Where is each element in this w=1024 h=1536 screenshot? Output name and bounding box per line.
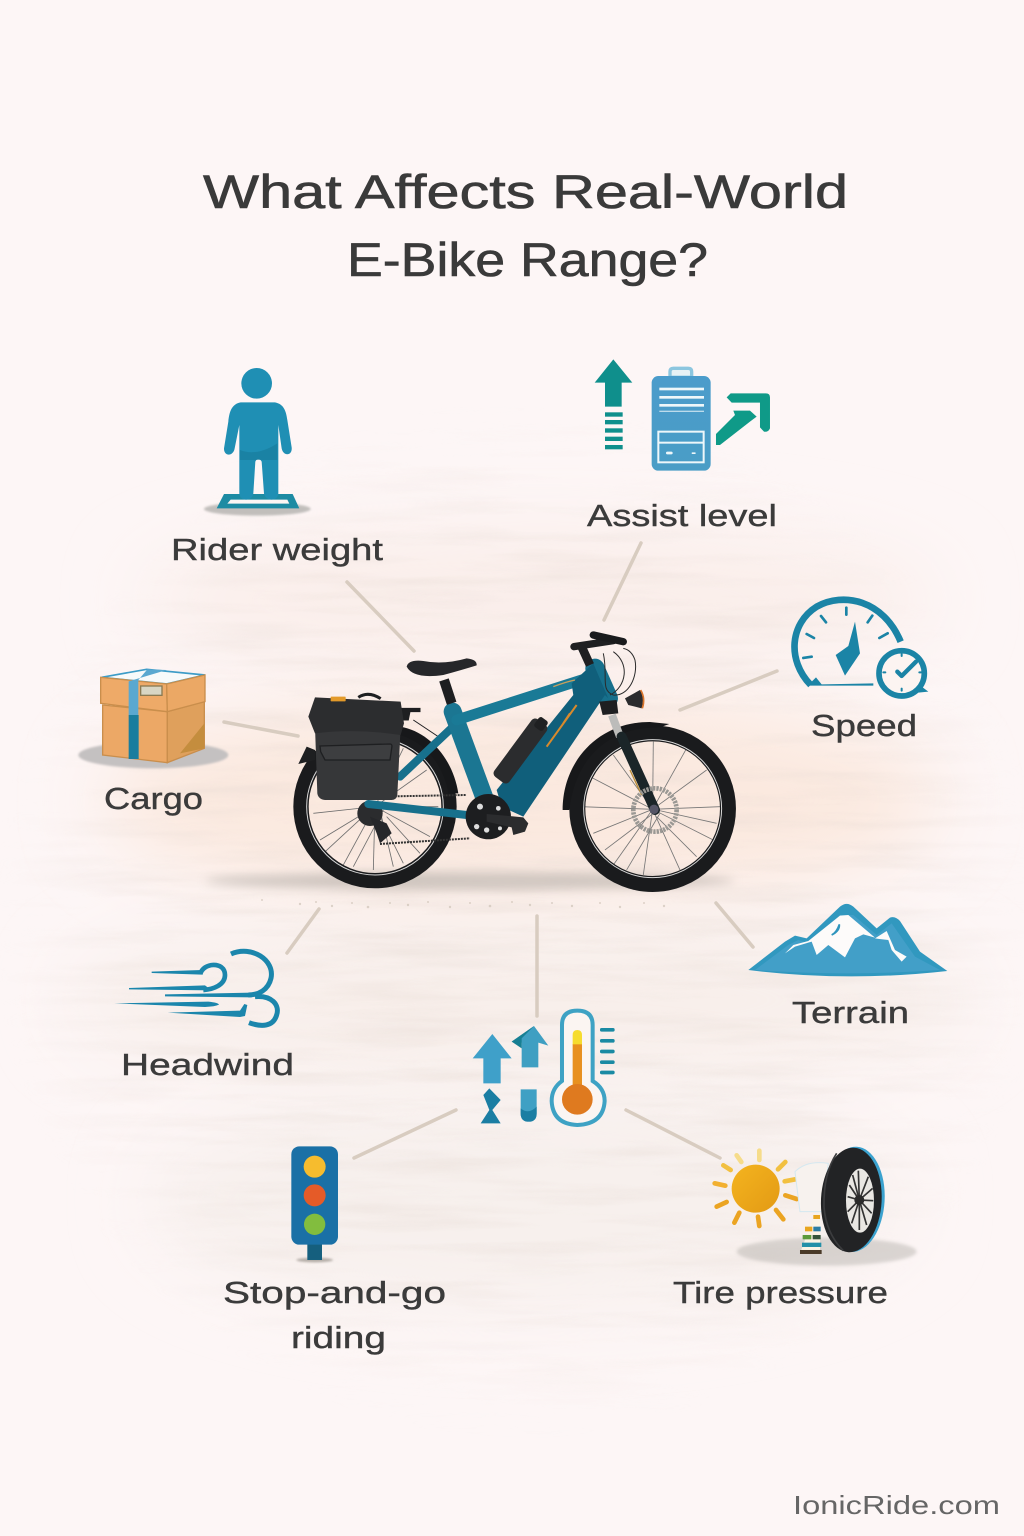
pressure gauge stack xyxy=(795,1163,828,1254)
diagonal arrow xyxy=(716,393,770,445)
icon: speedometer xyxy=(795,600,928,696)
label: terrain: Terrain xyxy=(792,995,909,1030)
thermometer xyxy=(552,1011,605,1125)
label: headwind: Headwind xyxy=(121,1047,294,1082)
icon: cargo box xyxy=(78,669,228,768)
label: cargo: Cargo xyxy=(104,781,203,816)
connector: stop-and-go xyxy=(354,1110,456,1158)
icon: assist level xyxy=(595,359,770,471)
label: rider weight: Rider weight xyxy=(171,532,383,567)
front wheel xyxy=(577,733,728,884)
label: stop-and-go riding xyxy=(223,1275,446,1355)
chain and drivetrain xyxy=(357,795,470,844)
top gust xyxy=(129,965,225,990)
background xyxy=(83,506,959,1323)
hourglass shape xyxy=(481,1088,501,1123)
connector: rider weight xyxy=(347,582,414,651)
arrow left xyxy=(473,1034,512,1083)
capsule xyxy=(521,1089,537,1122)
crank and chainring xyxy=(466,794,528,839)
title: E-Bike Range? xyxy=(347,233,708,286)
bicycle xyxy=(298,635,728,884)
connector: assist level xyxy=(604,543,641,620)
connector: speed xyxy=(680,671,777,710)
rear wheel xyxy=(301,733,449,881)
up arrow with steps xyxy=(595,359,632,449)
large curl xyxy=(231,951,277,1025)
connector: terrain xyxy=(716,903,753,947)
connector: cargo xyxy=(224,722,298,736)
label: stop-and-go riding: riding xyxy=(291,1320,386,1355)
arrow right xyxy=(512,1026,548,1067)
saddle xyxy=(407,658,477,676)
battery xyxy=(492,716,549,785)
title: What Affects Real-World xyxy=(203,165,848,218)
icon: terrain mountain xyxy=(748,904,947,976)
label: stop-and-go riding: Stop-and-go xyxy=(223,1275,446,1310)
connector: temperature xyxy=(535,916,539,1016)
frame tubes xyxy=(368,668,608,815)
tire xyxy=(818,1145,887,1254)
icon: traffic light xyxy=(291,1146,338,1262)
fork xyxy=(599,700,655,810)
label: tire pressure: Tire pressure xyxy=(673,1275,888,1310)
brake disc xyxy=(633,788,677,832)
icon: headwind xyxy=(114,951,277,1025)
pannier bag xyxy=(298,694,404,800)
connector: tire pressure xyxy=(626,1110,720,1158)
title xyxy=(203,165,848,286)
head gusset and down tube xyxy=(497,663,608,817)
label: assist level: Assist level xyxy=(587,498,777,533)
icon: sun and tire xyxy=(715,1145,917,1266)
seat post xyxy=(444,680,452,703)
handlebar and cables xyxy=(574,635,636,695)
rear fender xyxy=(400,727,458,793)
battery xyxy=(652,368,711,471)
connector: headwind xyxy=(287,909,319,953)
scale ticks xyxy=(600,1028,615,1074)
headlight xyxy=(625,690,644,708)
icon: temperature and arrows xyxy=(473,1011,615,1125)
sun xyxy=(715,1151,797,1226)
ground shadow xyxy=(205,872,735,908)
rear rack xyxy=(400,708,443,740)
icon: rider on scale xyxy=(204,368,311,516)
brand footer: IonicRide.com xyxy=(793,1490,1000,1520)
label: speed: Speed xyxy=(811,708,917,743)
front fender xyxy=(563,722,669,810)
